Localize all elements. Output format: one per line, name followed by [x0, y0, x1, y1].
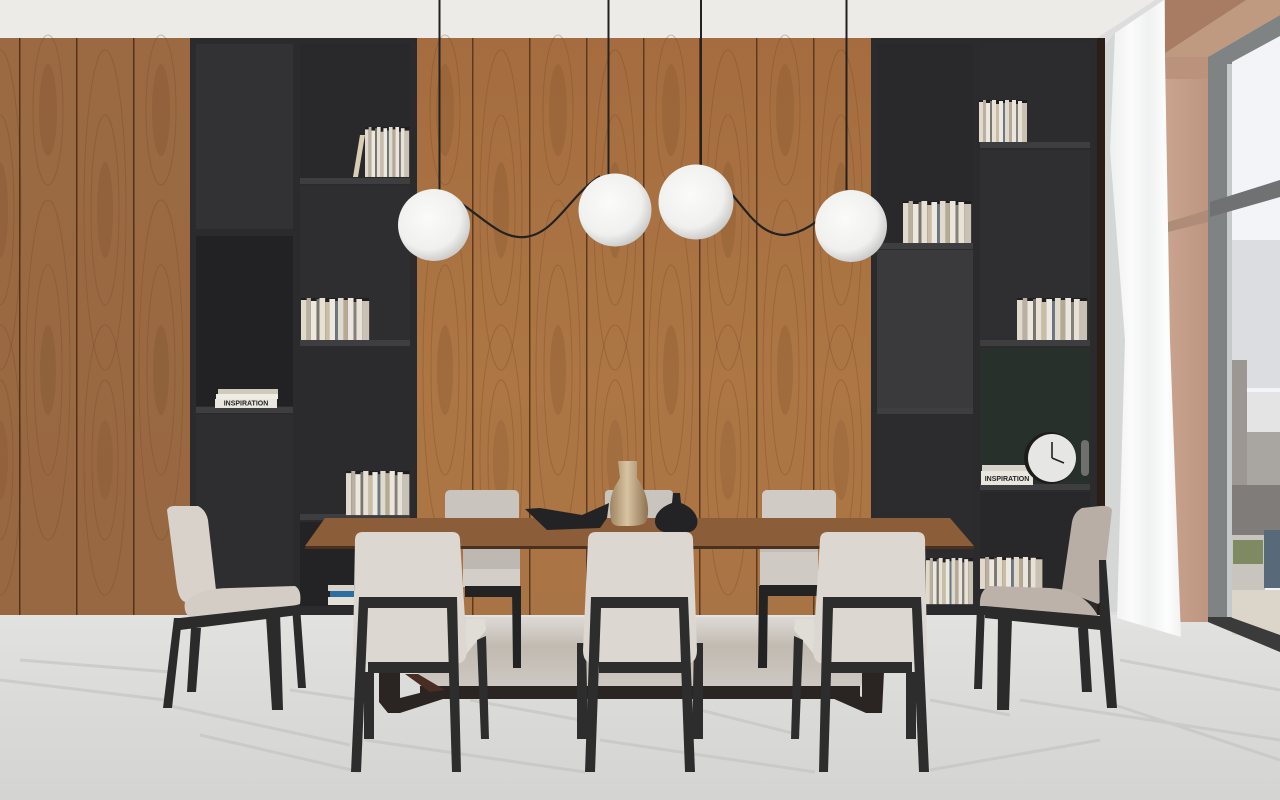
ceiling — [0, 0, 1155, 38]
right bookshelf — [871, 38, 1097, 615]
front chair centre — [577, 532, 703, 772]
front chair right — [791, 532, 929, 772]
books: left shelf low — [346, 471, 409, 515]
table base — [379, 672, 884, 713]
left bookshelf — [190, 38, 417, 615]
globe 1 — [398, 189, 470, 261]
books: stack with INSPIRATION title — [215, 389, 278, 408]
pendant lamp — [398, 0, 887, 262]
right side chair — [974, 506, 1117, 710]
back chair left — [445, 490, 521, 668]
floor — [0, 615, 1280, 800]
window with city view — [1208, 15, 1280, 652]
lamp connecting wave — [436, 167, 856, 237]
books: centre bottom shelf — [926, 558, 973, 604]
books: left shelf top — [353, 127, 409, 177]
table decor: black vase — [655, 493, 697, 532]
table decor: gold vase — [610, 461, 648, 526]
globe 3 — [658, 164, 734, 240]
books: right top shelf — [979, 100, 1027, 142]
wood wall: left section — [0, 35, 190, 615]
table decor: bowl — [525, 503, 609, 530]
books: bottom blue stack — [328, 585, 354, 605]
books: right middle shelf — [1017, 298, 1087, 340]
books: left shelf middle — [301, 298, 369, 340]
books: stack with INSPIRATION title — [981, 465, 1033, 485]
books: right bottom shelf — [980, 557, 1042, 589]
books: right centre shelf — [903, 201, 971, 243]
pink wall pillar — [1165, 0, 1280, 622]
lamp hanging cords — [440, 0, 846, 192]
back chair centre — [605, 490, 673, 530]
table top — [305, 518, 974, 549]
left side chair — [163, 506, 306, 710]
curtain — [1105, 0, 1181, 637]
window mullion — [1210, 180, 1280, 217]
wood wall: centre section — [416, 35, 872, 615]
dark gap behind curtain — [1097, 38, 1105, 615]
front chair left — [351, 532, 489, 772]
globe 4 — [815, 190, 887, 262]
back chair right — [758, 490, 836, 668]
books: stack with INSPIRATION title: INSPIRATION — [985, 476, 1029, 483]
books: stack with INSPIRATION title: INSPIRATION — [224, 400, 268, 408]
city buildings — [1232, 240, 1280, 635]
clock — [1024, 432, 1089, 484]
globe 2 — [578, 174, 652, 246]
